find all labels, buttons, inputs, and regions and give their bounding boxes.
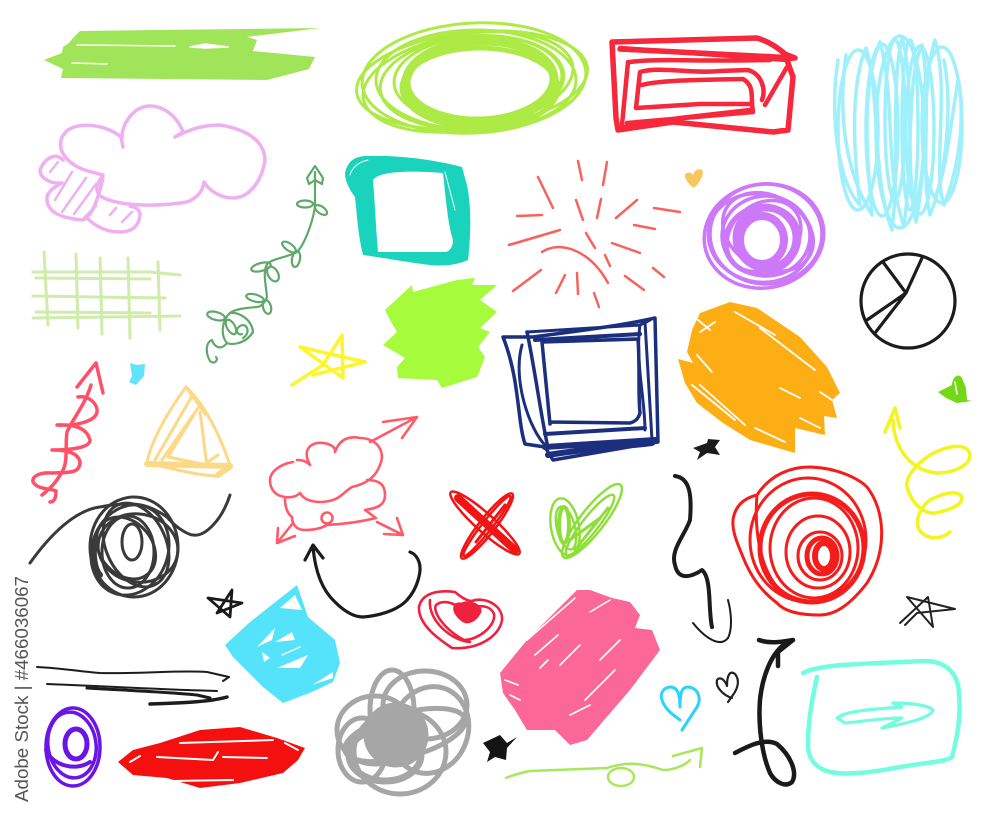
yellow spiral arrow [885, 408, 970, 538]
blue scribble [225, 585, 340, 703]
red spiral arrow [33, 363, 103, 502]
red rectangle scribble [612, 38, 795, 132]
pie chart doodle [861, 254, 955, 348]
black squiggle arrow [674, 476, 731, 642]
green scribble heart [546, 477, 630, 565]
small green heart [938, 376, 972, 403]
purple scribble circle [696, 174, 832, 298]
red spiral circle [733, 467, 882, 615]
black scribble ball with tails [30, 492, 230, 606]
purple spiral [44, 708, 100, 786]
salmon cloud with arrows [270, 417, 417, 543]
navy square scribble [503, 318, 658, 460]
black scribble star left [208, 590, 242, 617]
lime scribble [383, 278, 497, 388]
small gold heart [685, 169, 703, 188]
red burst lines [509, 161, 680, 307]
pale green long arrow [506, 748, 702, 786]
yellow star [292, 335, 365, 385]
red oval scribble [118, 727, 305, 788]
black outline star [900, 597, 955, 627]
pink cloud with hatching [40, 106, 265, 232]
small black star [693, 439, 720, 460]
green oval scribble [352, 17, 592, 146]
small blue butterfly [129, 363, 145, 385]
red scribble heart [419, 591, 502, 648]
vertical stock image caption: Adobe Stock | #466036067 [12, 576, 32, 802]
green marker strokes [44, 28, 320, 80]
pale green grid [33, 252, 180, 338]
teal square [345, 156, 470, 265]
mint box with arrow [803, 661, 960, 773]
leafy vine [206, 166, 329, 362]
pink scribble [500, 590, 660, 745]
blue outline heart [661, 687, 699, 730]
orange scribble [678, 302, 840, 453]
red X mark [445, 486, 525, 563]
black speed lines [37, 667, 229, 704]
black curved arrow [735, 640, 794, 784]
gray scribble ball [337, 670, 481, 794]
small black outline heart [717, 673, 738, 702]
black arc arrow [305, 545, 420, 617]
black ink star bottom [483, 735, 517, 762]
light blue scribble [835, 36, 962, 230]
peach triangle [147, 387, 231, 476]
